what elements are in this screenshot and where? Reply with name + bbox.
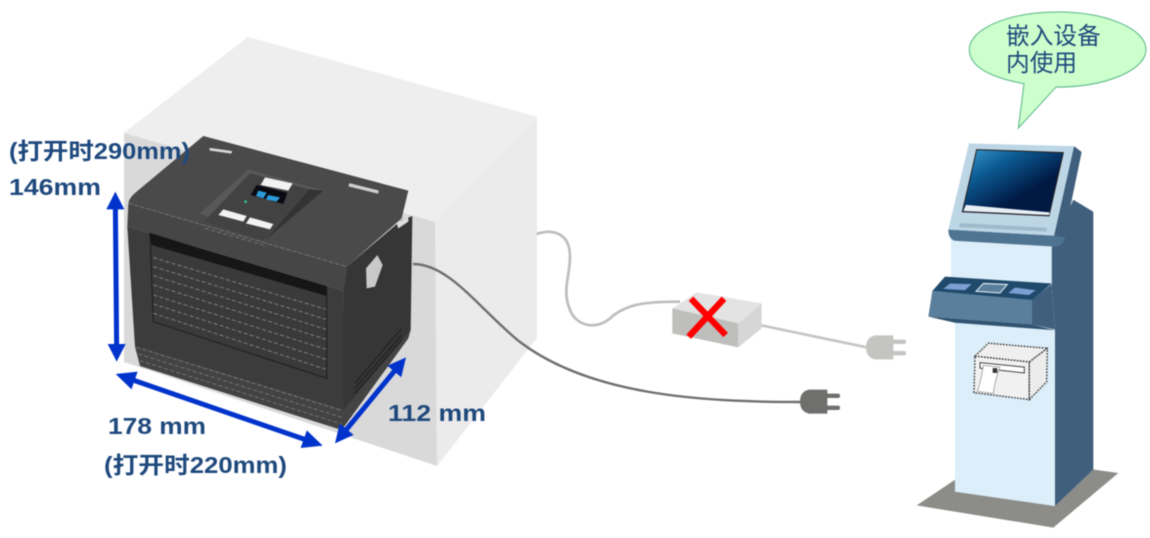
printer brand marks [209, 148, 379, 194]
printer front body [127, 227, 343, 410]
speech bubble [969, 12, 1146, 128]
kiosk monitor [948, 143, 1082, 247]
printer [127, 136, 412, 430]
printer connector [366, 217, 408, 288]
printer right side [342, 216, 412, 428]
bubble text: 嵌入设备 [1006, 23, 1101, 50]
gray envelope box [124, 37, 537, 466]
dark plug [800, 390, 840, 414]
kiosk [917, 143, 1118, 528]
label height: 146mm [9, 174, 101, 200]
kiosk lower front [955, 321, 1055, 506]
width arrow [116, 372, 323, 448]
label depth: 112 mm [388, 400, 486, 426]
dimension arrows [106, 192, 406, 448]
AC adapter crossed out [672, 292, 762, 347]
red cross [689, 299, 726, 337]
gray cable to AC adapter [537, 232, 867, 347]
printer top cover [128, 136, 408, 267]
printer control panel [200, 169, 323, 242]
printer paper door [150, 233, 327, 378]
kiosk side [1052, 200, 1093, 506]
kiosk upper front [951, 239, 1052, 284]
height arrow [106, 192, 126, 362]
label width: 178 mm [108, 413, 206, 439]
printer front lip [127, 203, 347, 291]
label open width: (打开时220mm) [104, 452, 287, 478]
kiosk shelf [928, 277, 1055, 330]
dimension labels [9, 138, 486, 478]
light gray plug [866, 335, 906, 359]
embedded printer illustration [974, 343, 1047, 400]
label open height: (打开时290mm) [9, 138, 190, 164]
printer base [135, 330, 411, 430]
depth arrow [335, 357, 406, 443]
dark power cable [413, 264, 800, 402]
kiosk floor shadow [917, 470, 1118, 528]
bubble text: 内使用 [1006, 50, 1077, 77]
